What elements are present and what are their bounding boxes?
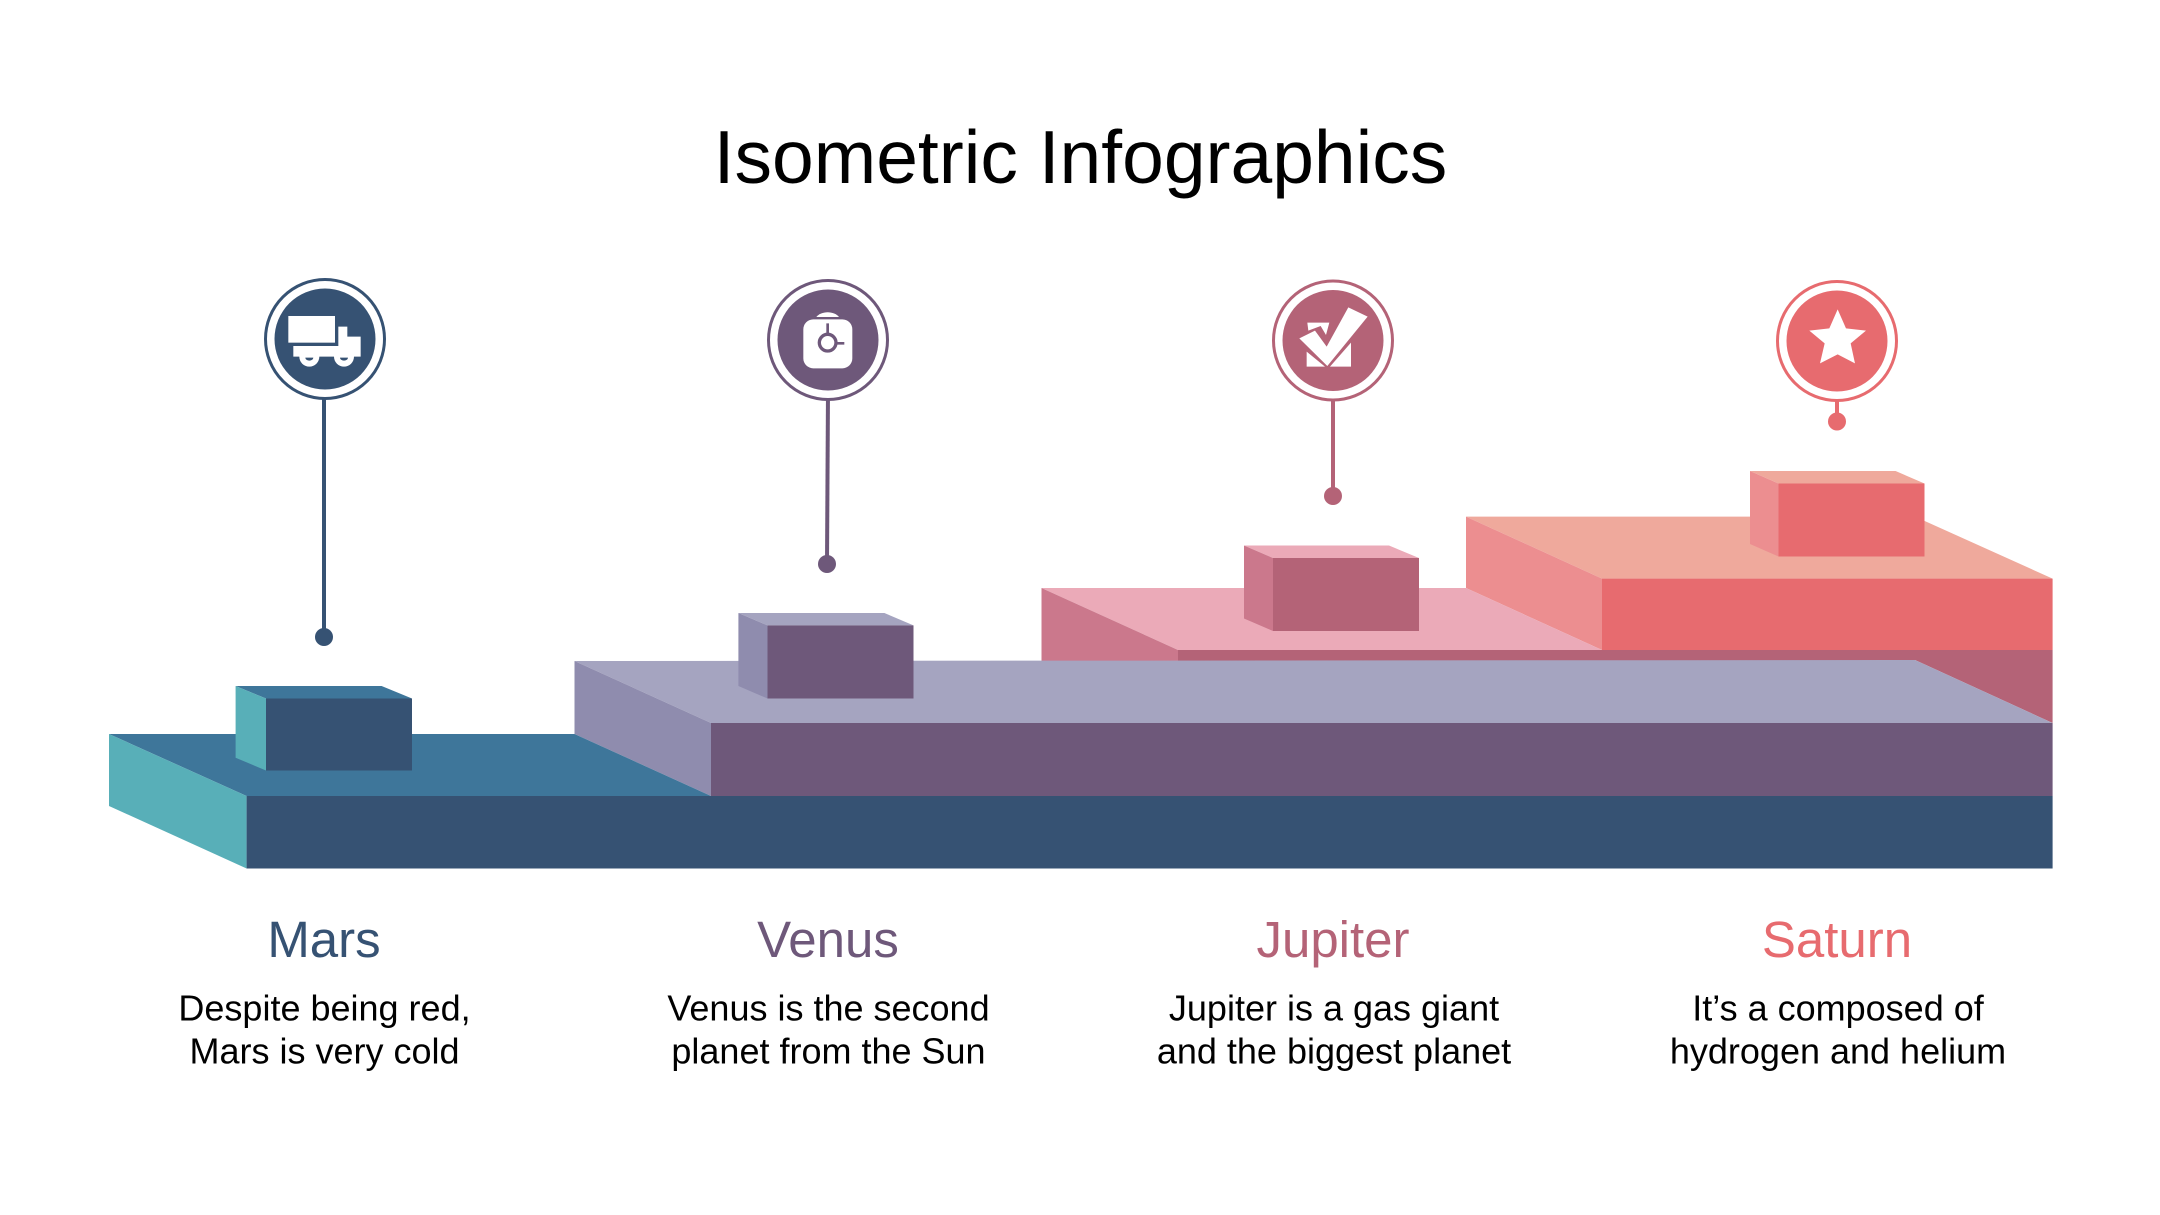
text block: Venus: Venus (757, 911, 899, 968)
pin: Venus stopwatch (768, 280, 888, 573)
text block: Jupiter: and the biggest planet (1157, 1030, 1511, 1072)
text block: Mars: Despite being red, (178, 988, 471, 1028)
block: Jupiter (1244, 546, 1419, 631)
text block: Saturn: Saturn (1762, 911, 1912, 968)
pin: Mars truck (266, 280, 384, 646)
text block: Venus: planet from the Sun (671, 1030, 986, 1072)
text block: Mars (178, 911, 471, 1072)
block: Saturn (1750, 471, 1924, 556)
block: Mars (236, 686, 412, 770)
block: Venus (738, 613, 914, 698)
text block: Saturn (1670, 911, 2006, 1072)
pin: Saturn star (1778, 282, 1896, 430)
text block: Jupiter: Jupiter is a gas giant (1169, 988, 1499, 1028)
text block: Venus (667, 911, 990, 1072)
panel: Jupiter platform (1042, 588, 2053, 723)
text block: Venus: Venus is the second (667, 988, 990, 1028)
text block: Mars: Mars is very cold (189, 1030, 460, 1072)
panel: Saturn platform (1466, 517, 2053, 650)
text block: Saturn: hydrogen and helium (1670, 1030, 2006, 1072)
icon: star (1809, 309, 1866, 363)
text block: Jupiter (1157, 911, 1511, 1072)
icon: stopwatch (803, 312, 852, 368)
title: Isometric Infographics (714, 115, 1447, 199)
panel: Venus platform (574, 660, 2053, 796)
text block: Jupiter: Jupiter (1256, 911, 1410, 968)
icon: checkmark (1299, 307, 1368, 367)
panel: Mars platform (109, 734, 2053, 868)
text block: Mars: Mars (267, 911, 381, 968)
pin: Jupiter checkmark (1274, 281, 1392, 505)
icon: truck (288, 316, 361, 367)
text block: Saturn: It’s a composed of (1692, 988, 1985, 1028)
